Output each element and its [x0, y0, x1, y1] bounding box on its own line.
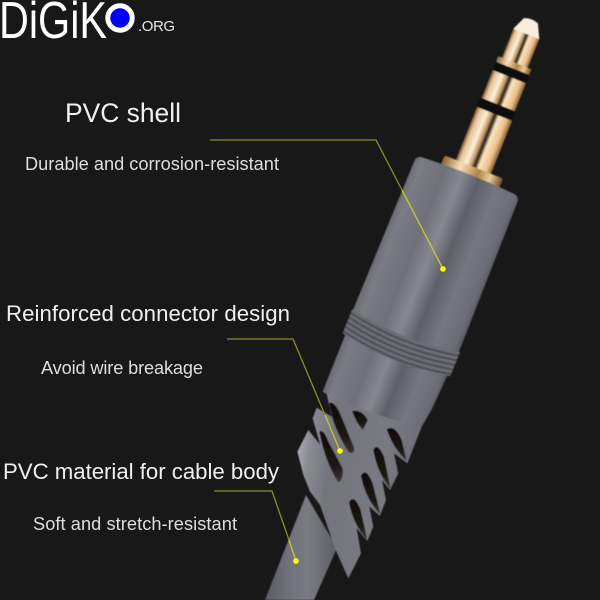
leader line over shell: [402, 190, 443, 269]
leader dot: [293, 558, 299, 564]
heading: PVC shell: [65, 98, 181, 128]
leader dot: [337, 448, 343, 454]
logo: [0, 0, 175, 50]
callout: cable body: [3, 459, 299, 564]
description: Soft and stretch-resistant: [33, 514, 237, 534]
connector illustration: [265, 0, 584, 600]
leader dot: [440, 266, 446, 272]
strain relief: [297, 387, 425, 578]
callout: reinforced connector: [6, 301, 343, 454]
ribbed ring: [340, 309, 460, 382]
leader line: [227, 339, 325, 415]
description: Avoid wire breakage: [41, 358, 203, 378]
cable body: [265, 495, 337, 600]
logo ring with blue dot: [108, 6, 132, 30]
lower collar: [322, 334, 448, 434]
plug assembly: [319, 0, 584, 435]
gold pin: [441, 8, 562, 188]
leader line: [210, 140, 402, 190]
leader line: [214, 491, 289, 540]
heading: PVC material for cable body: [3, 459, 280, 484]
callout: PVC shell: [25, 98, 446, 272]
leader line over cable: [289, 540, 296, 561]
heading: Reinforced connector design: [6, 301, 290, 326]
description: Durable and corrosion-resistant: [25, 154, 279, 174]
PVC shell: [350, 153, 521, 359]
logo suffix: .ORG: [138, 18, 175, 35]
leader line over relief: [325, 415, 340, 451]
relief slots: [319, 403, 407, 540]
